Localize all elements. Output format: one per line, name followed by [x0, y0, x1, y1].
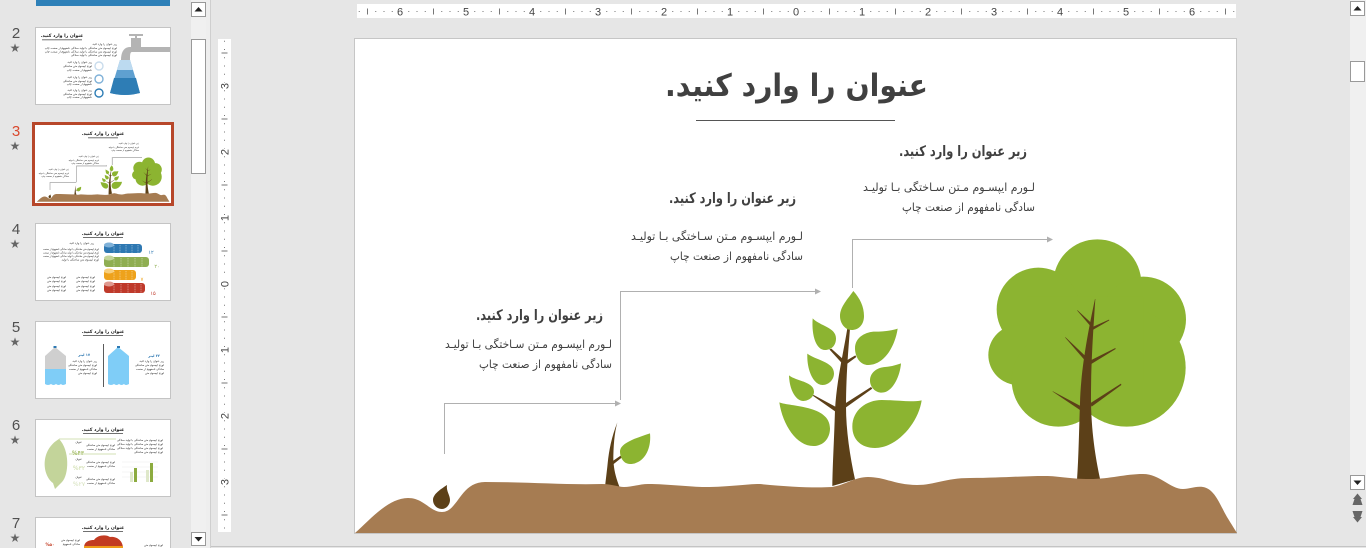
vertical ruler: 3 — [220, 479, 232, 485]
thumbnail: slide 4 — [36, 224, 170, 300]
thumbnail: slide 2: زیر عنوان را وارد کنید. — [92, 42, 118, 46]
text block: stage three: زیر عنوان را وارد کنید. — [899, 144, 1027, 160]
slide numbers and star marks: 4 — [12, 221, 20, 238]
thumbnail: slide 5: عنوان را وارد کنید. — [82, 329, 124, 335]
thumbnail: slide 6: عنوان — [75, 475, 82, 479]
thumbnail: slide 6: عنوان — [75, 440, 82, 444]
thumbnail: slide 2: لورم ایپسوم متن ساختگی — [63, 92, 92, 97]
horizontal ruler: 0 — [793, 6, 799, 18]
thumbnail: slide 3 selected: زیر عنوان را وارد کنید. — [78, 155, 99, 158]
horizontal ruler: 3 — [595, 6, 601, 18]
thumbnail: slide 3 selected — [34, 124, 172, 204]
slide numbers and star marks: 5 — [12, 319, 20, 336]
thumbnail: slide 6: لورم ایپسوم متن ساختگی با تولید سادگی — [117, 442, 163, 447]
vertical ruler: 2 — [220, 149, 232, 155]
horizontal ruler — [357, 4, 1236, 18]
thumbnail: slide 4: لورم ایپسوم متن — [47, 275, 66, 280]
left scrollbar — [191, 0, 211, 548]
thumbnail: slide 4: لورم ایپسوم متن ساختگی با تولید سادگی نامفهوم از صنعت — [43, 254, 99, 259]
icon: mature tree — [988, 239, 1186, 480]
slide numbers and star marks: 3 — [12, 123, 20, 140]
thumbnail: slide 5: لورم ایپسوم متن ساختگی — [135, 363, 164, 368]
thumbnail: slide 6: %۴۳ — [72, 450, 85, 457]
thumbnail: slide 4: ۲۰ — [154, 264, 160, 270]
horizontal ruler: 2 — [661, 6, 667, 18]
thumbnail: slide 5: زیر عنوان را وارد کنید. — [139, 359, 165, 363]
thumbnail: slide 3 selected: لورم ایپسوم متن ساختگی با تولید — [108, 146, 139, 149]
slide numbers and star marks: 2 — [12, 25, 20, 42]
slide numbers and star marks — [10, 25, 20, 545]
horizontal ruler: 4 — [529, 6, 535, 18]
horizontal ruler: 5 — [463, 6, 469, 18]
thumbnail: slide 6: لورم ایپسوم متن ساختگی — [86, 460, 115, 465]
slide numbers and star marks: ★ — [10, 139, 20, 153]
thumbnail: slide 3 selected: زیر عنوان را وارد کنید. — [48, 168, 69, 171]
thumbnail: slide 2: زیر عنوان را وارد کنید. — [67, 88, 93, 92]
text block: stage two: زیر عنوان را وارد کنید. — [669, 191, 796, 207]
vertical ruler: 1 — [220, 215, 232, 221]
panel: slide thumbnails — [10, 0, 172, 548]
thumbnail: slide 2: لورم ایپسوم متن ساختگی با تولید سادگی نامفهوم از صنعت چاپ — [45, 50, 117, 54]
thumbnail: slide 7 — [36, 518, 170, 548]
thumbnail: slide 4: ۷ — [141, 277, 144, 283]
thumbnail: slide 4: لورم ایپسوم متن — [76, 288, 95, 293]
horizontal ruler: 1 — [727, 6, 733, 18]
thumbnail: slide 2 — [36, 28, 170, 104]
thumbnail: slide 5: لورم ایپسوم متن — [78, 371, 97, 376]
thumbnail: slide 4: ۱۵ — [150, 291, 156, 297]
thumbnail: slide 6: لورم ایپسوم متن ساختگی — [86, 443, 115, 448]
text block: stage one: زیر عنوان را وارد کنید. — [476, 308, 603, 324]
icon: sapling — [779, 291, 922, 486]
vertical ruler: 3 — [220, 83, 232, 89]
thumbnail: slide 6: لورم ایپسوم متن ساختگی — [134, 450, 163, 455]
text block: stage two: سادگی نامفهوم از صنعت چاپ — [670, 249, 803, 264]
thumbnail: slide 4: لورم ایپسوم متن ساختگی با تولید سادگی نامفهوم از صنعت — [43, 250, 99, 256]
icon: sprout — [605, 422, 650, 487]
thumbnail: slide 4: لورم ایپسوم متن ساختگی با تولید سادگی نامفهوم از صنعت — [43, 247, 99, 252]
slide numbers and star marks: ★ — [10, 433, 20, 447]
panel: main slide — [354, 38, 1237, 534]
thumbnail: slide 6: لورم ایپسوم متن ساختگی با تولید سادگی — [117, 446, 163, 451]
horizontal ruler: 6 — [397, 6, 403, 18]
thumbnail: slide 2: عنوان را وارد کنید. — [41, 33, 83, 39]
thumbnail: slide 3 selected: سادگی نامفهوم از صنعت چاپ — [111, 149, 139, 152]
text block: stage three — [863, 144, 1035, 215]
thumbnail: slide 3 selected: سادگی نامفهوم از صنعت چاپ — [41, 175, 69, 178]
icon: seed — [433, 485, 450, 509]
thumbnail: slide 5: لورم ایپسوم متن ساختگی — [68, 363, 97, 368]
thumbnail: slide 3 selected: زیر عنوان را وارد کنید. — [118, 142, 139, 145]
thumbnail: slide 4: ۱۲ — [148, 250, 154, 256]
thumbnail: slide 6: %۳۲ — [73, 465, 85, 472]
text block: stage one: سادگی نامفهوم از صنعت چاپ — [479, 357, 612, 372]
thumbnail: slide 2: لورم ایپسوم متن ساختگی — [63, 64, 92, 69]
thumbnail: slide 2: لورم ایپسوم متن ساختگی — [63, 79, 92, 84]
thumbnail: slide 5: ۳۲ لیتر — [147, 354, 161, 358]
text block: stage one: لـورم ایپسـوم مـتن سـاختگی بـا تولیـد — [445, 337, 612, 352]
thumbnail: slide 6: عنوان را وارد کنید. — [82, 427, 124, 433]
thumbnail: slide 2: لورم ایپسوم متن ساختگی با تولید سادگی — [71, 53, 117, 58]
thumbnail: slide 7: سادگی نامفهوم — [63, 542, 81, 547]
ground — [355, 474, 1237, 533]
vertical ruler: 1 — [220, 347, 232, 353]
thumbnail: slide 5: لورم ایپسوم متن — [145, 371, 164, 376]
thumbnail: slide 4: لورم ایپسوم متن — [76, 284, 95, 289]
slide numbers and star marks: 7 — [12, 515, 20, 532]
thumbnail: slide 4: عنوان را وارد کنید. — [82, 231, 124, 237]
thumbnail: slide 6: لورم ایپسوم متن ساختگی — [86, 477, 115, 482]
thumbnail: slide 6: سادگی نامفهوم از صنعت — [87, 464, 116, 469]
slide numbers and star marks: ★ — [10, 41, 20, 55]
thumbnail: slide 5: سادگی نامفهوم از صنعت — [136, 367, 165, 372]
slide numbers and star marks: ★ — [10, 237, 20, 251]
thumbnail: slide 2: نامفهوم از صنعت چاپ — [67, 82, 92, 87]
text block: stage three: سادگی نامفهوم از صنعت چاپ — [902, 200, 1035, 215]
thumbnail: slide 2: زیر عنوان را وارد کنید. — [67, 60, 93, 64]
text block: stage two: لـورم ایپسـوم مـتن سـاختگی بـا تولیـد — [631, 229, 803, 244]
slide numbers and star marks: ★ — [10, 531, 20, 545]
illustration: growth scene — [355, 236, 1237, 533]
text block: stage three: لـورم ایپسـوم مـتن سـاختگی بـا تولیـد — [863, 180, 1035, 195]
thumbnail: slide 4: لورم ایپسوم متن — [76, 279, 95, 284]
thumbnail: slide 3 selected: لورم ایپسوم متن ساختگی با تولید — [38, 172, 69, 175]
horizontal ruler: 2 — [925, 6, 931, 18]
thumbnail: slide 7: %۵۰ — [46, 542, 54, 547]
vertical ruler — [218, 39, 232, 532]
text block: stage two — [631, 191, 803, 264]
horizontal ruler: 6 — [1189, 6, 1195, 18]
thumbnail: slide 4: زیر عنوان را وارد کنید. — [69, 241, 95, 245]
title: عنوان را وارد کنید. — [665, 68, 928, 104]
thumbnail: slide 7: لورم ایپسوم متن — [144, 543, 163, 548]
thumbnail: slide 7: عنوان را وارد کنید. — [82, 525, 124, 531]
thumbnail: slide 4: لورم ایپسوم متن — [47, 288, 66, 293]
horizontal ruler: 4 — [1057, 6, 1063, 18]
thumbnail: slide 6: عنوان — [75, 457, 82, 461]
text block: stage one — [445, 308, 612, 372]
slide numbers and star marks: 6 — [12, 417, 20, 434]
arrow: seed to sprout — [444, 400, 621, 454]
thumbnail: slide 6 — [36, 420, 170, 496]
thumbnail: slide 4: لورم ایپسوم متن — [76, 275, 95, 280]
thumbnail: slide 7: لورم ایپسوم متن — [61, 538, 80, 543]
thumbnail: slide 5: زیر عنوان را وارد کنید. — [72, 359, 98, 363]
thumbnail: slide 5: سادگی نامفهوم از صنعت — [69, 367, 98, 372]
thumbnail: slide 2: لورم ایپسوم متن ساختگی با تولید سادگی نامفهوم از صنعت چاپ — [45, 46, 117, 51]
vertical ruler: 2 — [220, 413, 232, 419]
thumbnail: slide 4: لورم ایپسوم متن — [47, 279, 66, 284]
thumbnail: slide 3 selected: سادگی نامفهوم از صنعت چاپ — [71, 162, 99, 165]
thumbnail: slide 3 selected: عنوان را وارد کنید. — [82, 131, 124, 137]
thumbnail: slide 2: نامفهوم از صنعت چاپ — [67, 68, 92, 73]
thumbnail: slide 4: لورم ایپسوم متن ساختگی با تولید — [61, 258, 99, 262]
thumbnail: slide 2: زیر عنوان را وارد کنید. — [67, 75, 93, 79]
thumbnail: slide 4: لورم ایپسوم متن — [47, 284, 66, 289]
thumbnail: slide 1 fragment — [36, 0, 170, 6]
horizontal ruler: 1 — [859, 6, 865, 18]
arrow: sapling to tree — [852, 236, 1053, 288]
horizontal ruler: 5 — [1123, 6, 1129, 18]
thumbnail: slide 5: ۱۷ لیتر — [77, 353, 91, 357]
slide numbers and star marks: ★ — [10, 335, 20, 349]
thumbnail: slide 2: نامفهوم از صنعت چاپ — [67, 95, 92, 100]
horizontal ruler: 3 — [991, 6, 997, 18]
arrow: sprout to sapling — [620, 288, 821, 400]
thumbnail: slide 6: %۲۷ — [73, 481, 86, 488]
vertical ruler: 0 — [220, 281, 232, 287]
thumbnail: slide 5 — [36, 322, 170, 398]
thumbnail: slide 3 selected: لورم ایپسوم متن ساختگی با تولید — [68, 159, 99, 162]
thumbnail: slide 6: لورم ایپسوم متن ساختگی با تولید سادگی — [117, 438, 163, 443]
thumbnail: slide 6: سادگی نامفهوم از صنعت — [87, 481, 116, 486]
thumbnail: slide 6: سادگی نامفهوم از صنعت — [87, 447, 116, 452]
title underline — [696, 120, 895, 121]
